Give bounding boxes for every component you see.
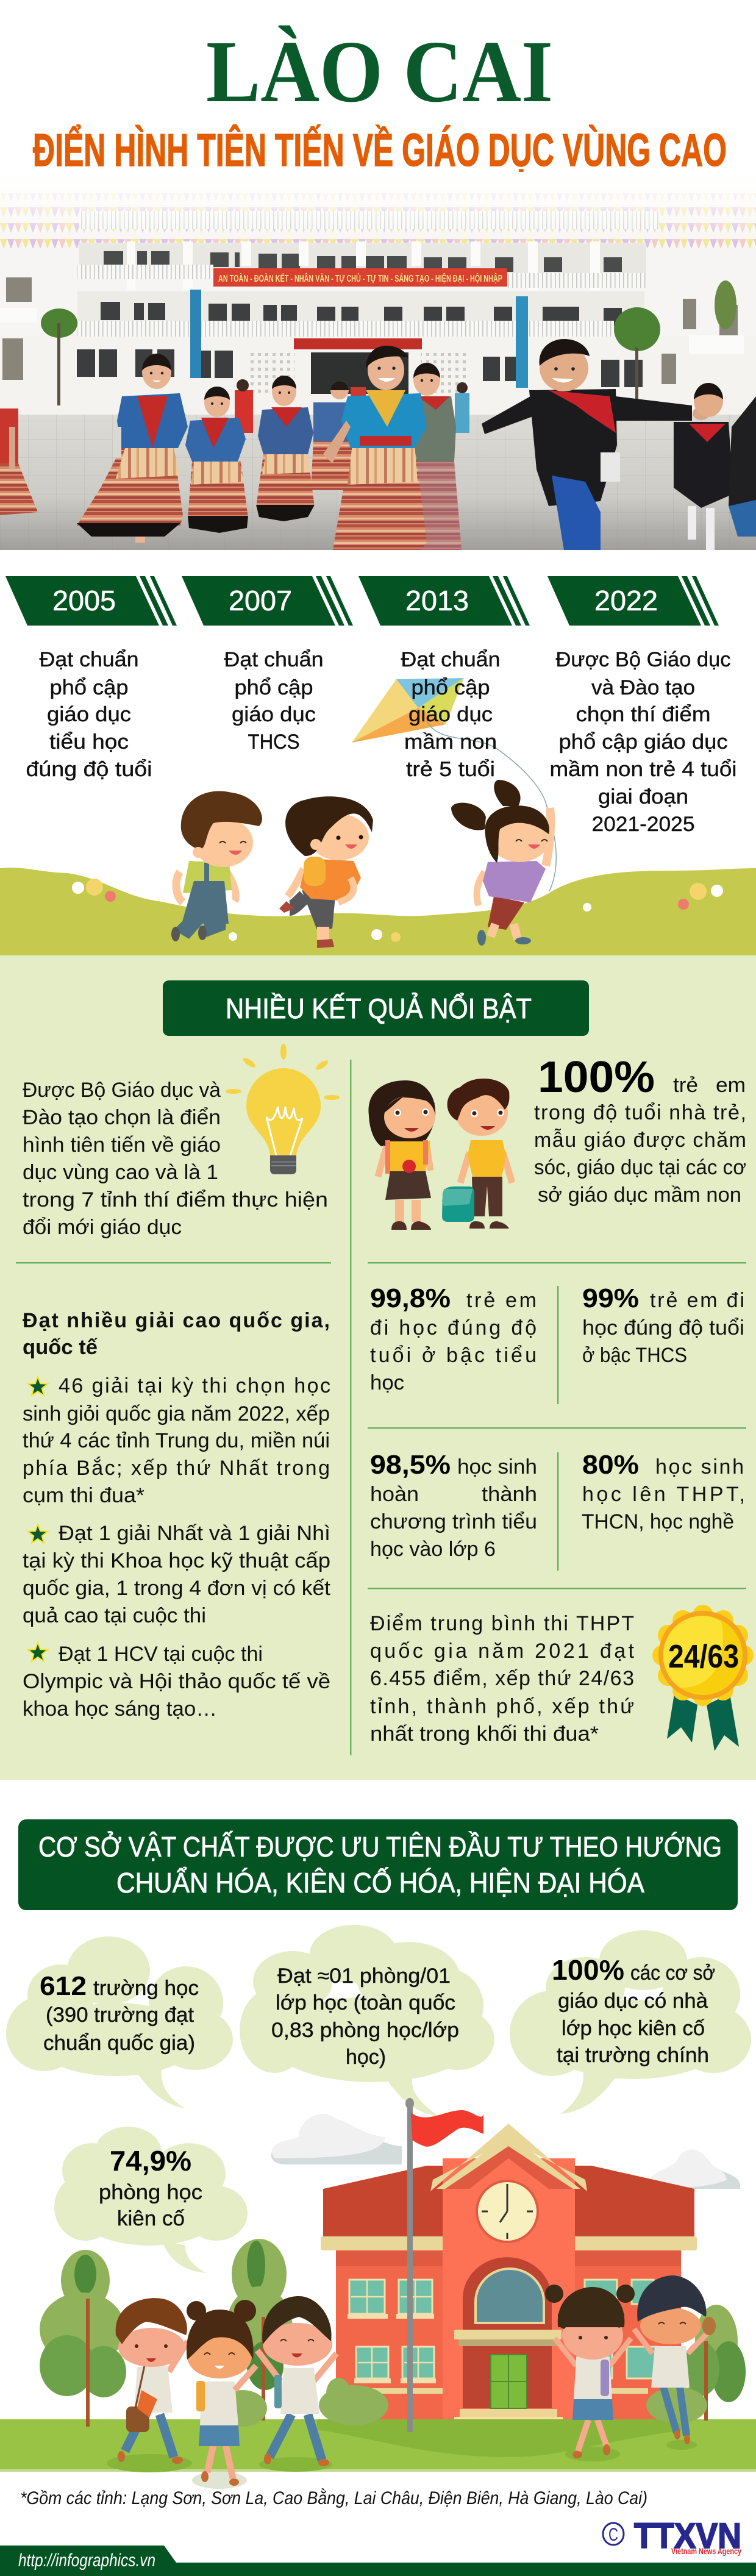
text: 2007 milestone: giáo dục — [232, 703, 316, 726]
stat: 80%: THCN, học nghề — [582, 1510, 734, 1533]
stat: 98,5%: học vào lớp 6 — [370, 1538, 496, 1561]
photo: girl 2 — [185, 387, 248, 533]
text: 2005 milestone: phổ cập — [50, 676, 128, 699]
student: boy — [442, 1079, 512, 1229]
text: 2007 milestone — [224, 648, 323, 754]
stat: 99,8%: đi học đúng độ — [370, 1316, 537, 1340]
hero photo: ethnic minority students running in the school yard — [0, 172, 756, 550]
list item: 46 national awards: sinh giỏi quốc gia năm 2022, xếp — [23, 1402, 330, 1425]
text: 2013 milestone: trẻ 5 tuổi — [406, 758, 495, 781]
timeline ribbons — [5, 576, 719, 626]
stat: 100%: em — [716, 1074, 746, 1097]
title: LÀO CAI — [206, 23, 553, 121]
ribbon: 2013: 2013 — [405, 585, 469, 616]
logo: TTXVN: TTXVN — [634, 2516, 741, 2556]
stat: 80%: học sinh — [655, 1455, 744, 1479]
text: 2007 milestone: Đạt chuẩn — [224, 648, 323, 671]
photo: girl next to centre — [410, 363, 462, 550]
list item: Olympic medal — [23, 1643, 330, 1721]
text: exam score statement — [370, 1612, 635, 1746]
ribbon: 2005 — [5, 576, 177, 626]
photo: running boy in black — [482, 339, 710, 550]
stat: 100%: 100% — [538, 1053, 655, 1102]
illustration: child in orange shirt — [279, 796, 373, 948]
stat: 99,8%: tuổi ở bậc tiểu — [370, 1344, 537, 1367]
photo: teachers in background — [235, 379, 469, 433]
speech bubble: 612 schools — [6, 1936, 233, 2108]
ribbon: 2007: 2007 — [229, 585, 292, 616]
stat: 100%: sóc, giáo dục tại các cơ — [534, 1156, 746, 1179]
school: entrance — [450, 2257, 568, 2432]
text: awards heading — [23, 1309, 330, 1359]
tree: right — [646, 2305, 746, 2424]
text: pilot province statement: hình tiên tiến về giáo — [23, 1133, 221, 1157]
speech bubble: classroom ratio: 0,83 phòng học/lớp — [271, 2019, 459, 2042]
text: 2022 milestone — [550, 648, 736, 836]
school: walls — [336, 2250, 681, 2422]
stat: 99% — [582, 1283, 744, 1367]
speech bubble: 74,9%: phòng học — [99, 2181, 202, 2204]
list item: science award: quả cao tại cuộc thi — [23, 1604, 206, 1627]
ribbon: 2007 — [182, 576, 353, 626]
text: pilot province statement: dục vùng cao và là 1 — [23, 1161, 218, 1184]
speech bubble: 100% solid facilities: các cơ sở — [630, 1961, 715, 1985]
tree: left — [40, 2250, 126, 2427]
illustration: girl flying kite — [451, 780, 552, 946]
text: 2022 milestone: 2021-2025 — [591, 813, 695, 836]
speech bubble: 612 schools: chuẩn quốc gia) — [43, 2032, 195, 2055]
timeline text blocks — [26, 648, 736, 836]
stat: 99%: ở bậc THCS — [582, 1344, 687, 1367]
tree: centre — [226, 2239, 293, 2421]
photo: back group of girls — [311, 381, 354, 490]
stat: 99%: học đúng độ tuổi — [582, 1316, 744, 1340]
stat: 99,8%: trẻ em — [466, 1289, 537, 1312]
stat: 99,8%: 99,8% — [370, 1283, 451, 1313]
text: 2013 milestone: mầm non — [404, 730, 497, 754]
text: 2013 milestone: giáo dục — [408, 703, 493, 726]
stat: 99%: 99% — [582, 1283, 639, 1313]
speech bubble: 100% solid facilities: tại trường chính — [557, 2044, 709, 2067]
speech bubble: classroom ratio: học) — [346, 2046, 386, 2069]
icon: light bulb — [226, 1044, 340, 1174]
footer bar with website: http://infographics.vn — [18, 2550, 155, 2571]
illustration: five students in front of the school — [107, 2275, 716, 2489]
photo: red school banner — [213, 268, 507, 287]
text: 2022 milestone: phổ cập giáo dục — [558, 730, 728, 754]
ground: lawn — [0, 2419, 756, 2472]
speech bubble: 100% solid facilities — [510, 1930, 751, 2114]
speech bubble: 100% solid facilities: 100% — [552, 1954, 624, 1986]
text: 2007 milestone: phổ cập — [234, 676, 313, 699]
text: 2022 milestone: giai đoạn — [598, 785, 688, 808]
stat: 98,5%: thành — [482, 1483, 537, 1506]
stat: 98,5% — [370, 1450, 537, 1561]
speech bubble: classroom ratio: lớp học (toàn quốc — [276, 1991, 455, 2014]
photo: school building — [0, 172, 756, 422]
photo: small boy on right — [674, 383, 733, 550]
text: pilot province statement: Đào tạo chọn là điển — [23, 1106, 221, 1129]
stat: 99%: trẻ em đi — [650, 1289, 744, 1312]
student: girl with pigtails — [545, 2285, 635, 2461]
heading: results section: NHIỀU KẾT QUẢ NỔI BẬT — [226, 993, 532, 1024]
speech bubble: 612 schools: trường học — [93, 1977, 199, 2000]
text: 2013 milestone: phổ cập — [411, 676, 490, 699]
photo: girl left edge — [0, 409, 38, 515]
stat: 100%: trong độ tuổi nhà trẻ, — [534, 1101, 746, 1124]
text: 2022 milestone: mầm non trẻ 4 tuổi — [550, 758, 736, 781]
text: exam score statement: quốc gia năm 2021 đạt — [370, 1639, 635, 1663]
speech bubble: 100% solid facilities: lớp học kiên cố — [562, 2017, 705, 2040]
stat: 100%: trẻ — [673, 1074, 698, 1097]
speech bubble: 74,9%: kiên cố — [117, 2207, 185, 2230]
list item: 46 national awards: cụm thi đua* — [23, 1484, 144, 1507]
illustration: school building — [321, 2124, 697, 2432]
stat: 100%: mẫu giáo được chăm — [534, 1129, 746, 1152]
text: exam score statement: nhất trong khối thi đua* — [370, 1722, 599, 1746]
photo: person at right edge — [729, 396, 756, 537]
flagpole with flag — [405, 2098, 483, 2432]
list item: 46 national awards — [23, 1374, 330, 1507]
list item: 46 national awards: thứ 4 các tỉnh Trung du, miền núi — [23, 1429, 330, 1452]
student: girl — [368, 1080, 435, 1230]
list item: 46 national awards: phía Bắc; xếp thứ Nhất trong — [23, 1457, 330, 1480]
illustration: kite with string — [352, 678, 556, 891]
photo: trees — [41, 280, 736, 409]
text: 2005 milestone: đúng độ tuổi — [26, 758, 152, 781]
text: 2005 milestone: Đạt chuẩn — [39, 648, 139, 671]
student: girl with buns — [187, 2300, 256, 2489]
illustration: trees and bushes — [40, 2239, 746, 2427]
photo: red school banner: AN TOÀN - ĐOÀN KẾT - NHÂN VĂN - TỰ CHỦ - TỰ TIN - SÁNG TẠO - HIỆN ĐẠI - HỘI NHẬP — [218, 273, 502, 284]
stat: 80%: 80% — [582, 1450, 639, 1480]
footnote: *Gồm các tỉnh: Lạng Sơn, Sơn La, Cao Bằng, Lai Châu, Điện Biên, Hà Giang, Lào Cai) — [20, 2488, 647, 2508]
stat: 100%: sở giáo dục mầm non — [538, 1183, 741, 1207]
speech bubble: 612 schools: 612 — [40, 1971, 87, 2001]
stat: 98,5%: hoàn — [370, 1483, 419, 1506]
text: awards heading: Đạt nhiều giải cao quốc gia, — [23, 1309, 330, 1332]
text: 2013 milestone — [401, 648, 500, 781]
icon: medal 24/63 — [652, 1605, 754, 1751]
stat: 80% — [582, 1450, 745, 1533]
list item: science award: quốc gia, 1 trong 4 đơn vị có kết — [23, 1577, 331, 1600]
text: 2022 milestone: chọn thí điểm — [576, 703, 711, 726]
list item: science award: tại kỳ thi Khoa học kỹ thuật cấp — [23, 1549, 330, 1572]
stat: 80%: học lên THPT, — [582, 1483, 745, 1506]
speech bubble: 74,9% — [54, 2127, 248, 2273]
light green results panel background — [0, 955, 756, 1780]
illustration: two students — [368, 1079, 512, 1230]
text: pilot province statement: Được Bộ Giáo dục và — [23, 1079, 221, 1102]
text: exam score statement: Điểm trung bình thi THPT — [370, 1612, 634, 1635]
text: 2022 milestone: Được Bộ Giáo dục — [556, 648, 730, 671]
list item: 46 national awards: 46 giải tại kỳ thi chọn học — [59, 1374, 330, 1397]
text: 2005 milestone: tiểu học — [49, 730, 129, 754]
school: roof — [321, 2166, 697, 2250]
stat: 100% — [534, 1053, 746, 1207]
school: clock tower — [430, 2124, 587, 2422]
stat: 98,5%: chương trình tiểu — [370, 1510, 537, 1533]
stat: 99,8%: học — [370, 1371, 404, 1394]
list item: Olympic medal: Olympic và Hội thảo quốc tế về — [23, 1670, 330, 1693]
list item: Olympic medal: khoa học sáng tạo… — [23, 1697, 217, 1721]
text: pilot province statement: đổi mới giáo dục — [23, 1216, 182, 1239]
list item: science award — [23, 1522, 331, 1627]
heading: results section — [163, 980, 589, 1036]
text: exam score statement: tỉnh, thành phố, xếp thứ — [370, 1695, 634, 1718]
photo: girl 3 — [256, 376, 315, 521]
ribbon: 2013 — [358, 576, 530, 626]
school: clock — [476, 2180, 539, 2243]
title — [33, 23, 727, 176]
ribbon: 2022: 2022 — [594, 585, 658, 616]
list item: science award: Đạt 1 giải Nhất và 1 giải Nhì — [59, 1522, 330, 1545]
photo: girl 1 — [77, 354, 188, 543]
text: pilot province statement — [23, 1079, 328, 1239]
icon: medal 24/63: 24/63 — [668, 1638, 739, 1675]
speech bubble: classroom ratio — [240, 1925, 494, 2116]
text: 2022 milestone: và Đào tạo — [591, 676, 695, 699]
list item: Olympic medal: Đạt 1 HCV tại cuộc thi — [59, 1643, 263, 1666]
logo: TTXVN: C — [608, 2525, 618, 2545]
hill: green meadow — [0, 868, 756, 955]
hill: flowers — [72, 879, 723, 942]
footer bar with website — [0, 2546, 756, 2576]
heading: facilities section — [18, 1819, 738, 1910]
text: pilot province statement: trong 7 tỉnh thí điểm thực hiện — [23, 1188, 328, 1211]
text: awards heading: quốc tế — [23, 1336, 98, 1359]
speech bubble: 612 schools: (390 trường đạt — [46, 2003, 194, 2027]
clouds — [271, 2114, 740, 2189]
text: 2005 milestone — [26, 648, 152, 781]
speech bubble: classroom ratio: Đạt ≈01 phòng/01 — [277, 1964, 451, 1988]
ribbon: 2005: 2005 — [52, 585, 116, 616]
student: boy waving — [257, 2296, 337, 2472]
text: exam score statement: 6.455 điểm, xếp thứ 24/63 — [370, 1667, 634, 1690]
speech bubble: 74,9%: 74,9% — [110, 2145, 191, 2177]
photo: main girl — [323, 346, 427, 550]
student: boy with bag — [107, 2298, 192, 2472]
ribbon: 2022 — [547, 576, 719, 626]
photo: paved yard — [0, 415, 756, 550]
bush: centre — [218, 2378, 388, 2427]
heading: facilities section: CHUẨN HÓA, KIÊN CỐ HÓA, HIỆN ĐẠI HÓA — [116, 1867, 644, 1899]
school: windows — [348, 2280, 658, 2383]
illustration: boy in overalls — [171, 791, 262, 941]
student: boy with palette — [634, 2275, 716, 2450]
speech bubble: 100% solid facilities: giáo dục có nhà — [558, 1989, 708, 2013]
text: 2013 milestone: Đạt chuẩn — [401, 648, 500, 671]
dividers — [16, 1060, 746, 1755]
stat: 99,8% — [370, 1283, 537, 1394]
stat: 98,5%: học sinh — [457, 1455, 537, 1479]
stat: 98,5%: 98,5% — [370, 1450, 451, 1480]
text: 2007 milestone: THCS — [248, 730, 300, 754]
text: 2005 milestone: giáo dục — [47, 703, 131, 726]
